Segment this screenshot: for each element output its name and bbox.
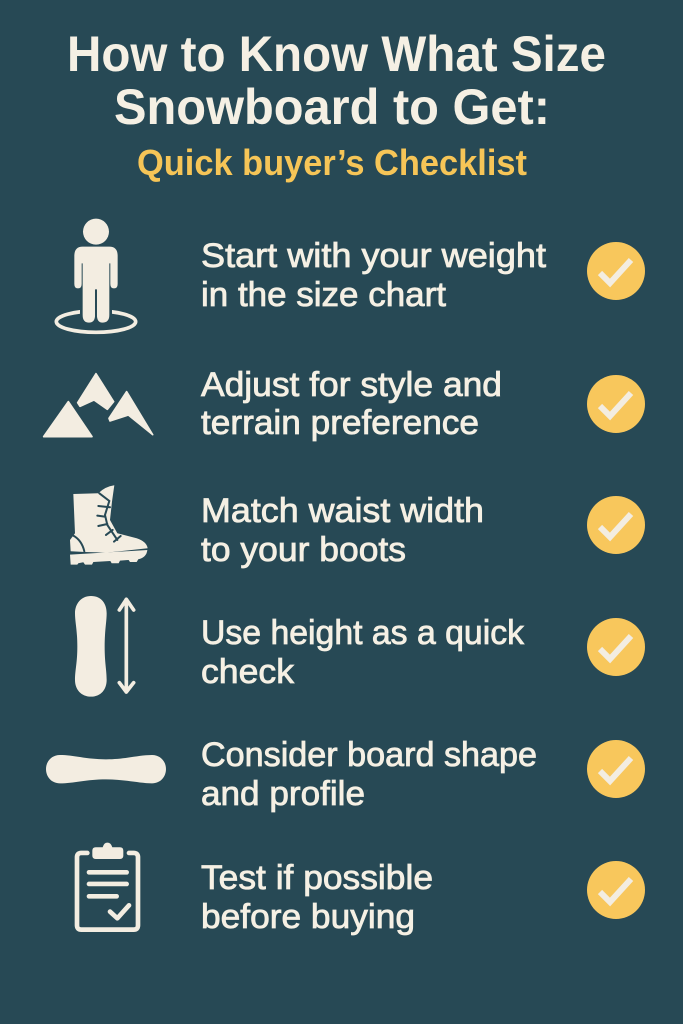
step 6 text: Test if possible: [201, 859, 433, 897]
title: [67, 26, 606, 135]
step 3 text: to your boots: [201, 531, 406, 569]
check badge 4: [587, 618, 645, 676]
icon: horizontal board: [46, 755, 166, 783]
check badge 6: [587, 861, 645, 919]
check badge 5: [587, 740, 645, 798]
step 1 text: in the size chart: [201, 276, 447, 314]
title: Snowboard to Get:: [114, 79, 550, 135]
step 2 text: terrain preference: [201, 404, 479, 442]
title: How to Know What Size: [67, 26, 606, 82]
step 2 text: Adjust for style and: [201, 366, 502, 404]
step 2 text: [201, 366, 502, 442]
step 5 text: and profile: [201, 775, 365, 813]
step 5 text: [201, 736, 537, 813]
step 1 text: [201, 237, 547, 314]
check badge 3: [587, 496, 645, 554]
step 3 text: [201, 492, 484, 569]
step 6 text: [201, 859, 433, 936]
icon: boot: [70, 485, 148, 565]
check badge 1: [587, 242, 645, 300]
icon: vertical board with height arrow: [75, 596, 134, 697]
icon: mountains: [44, 374, 153, 437]
step 4 text: Use height as a quick: [201, 614, 525, 652]
check badge 2: [587, 375, 645, 433]
icon: person on target: [56, 219, 136, 332]
step 4 text: check: [201, 653, 295, 691]
subtitle: Quick buyer’s Checklist: [137, 142, 527, 183]
step 1 text: Start with your weight: [201, 237, 547, 275]
step 6 text: before buying: [201, 898, 415, 936]
step 4 text: [201, 614, 525, 691]
icon: clipboard with check: [77, 843, 138, 930]
step 3 text: Match waist width: [201, 492, 484, 530]
step 5 text: Consider board shape: [201, 736, 537, 774]
